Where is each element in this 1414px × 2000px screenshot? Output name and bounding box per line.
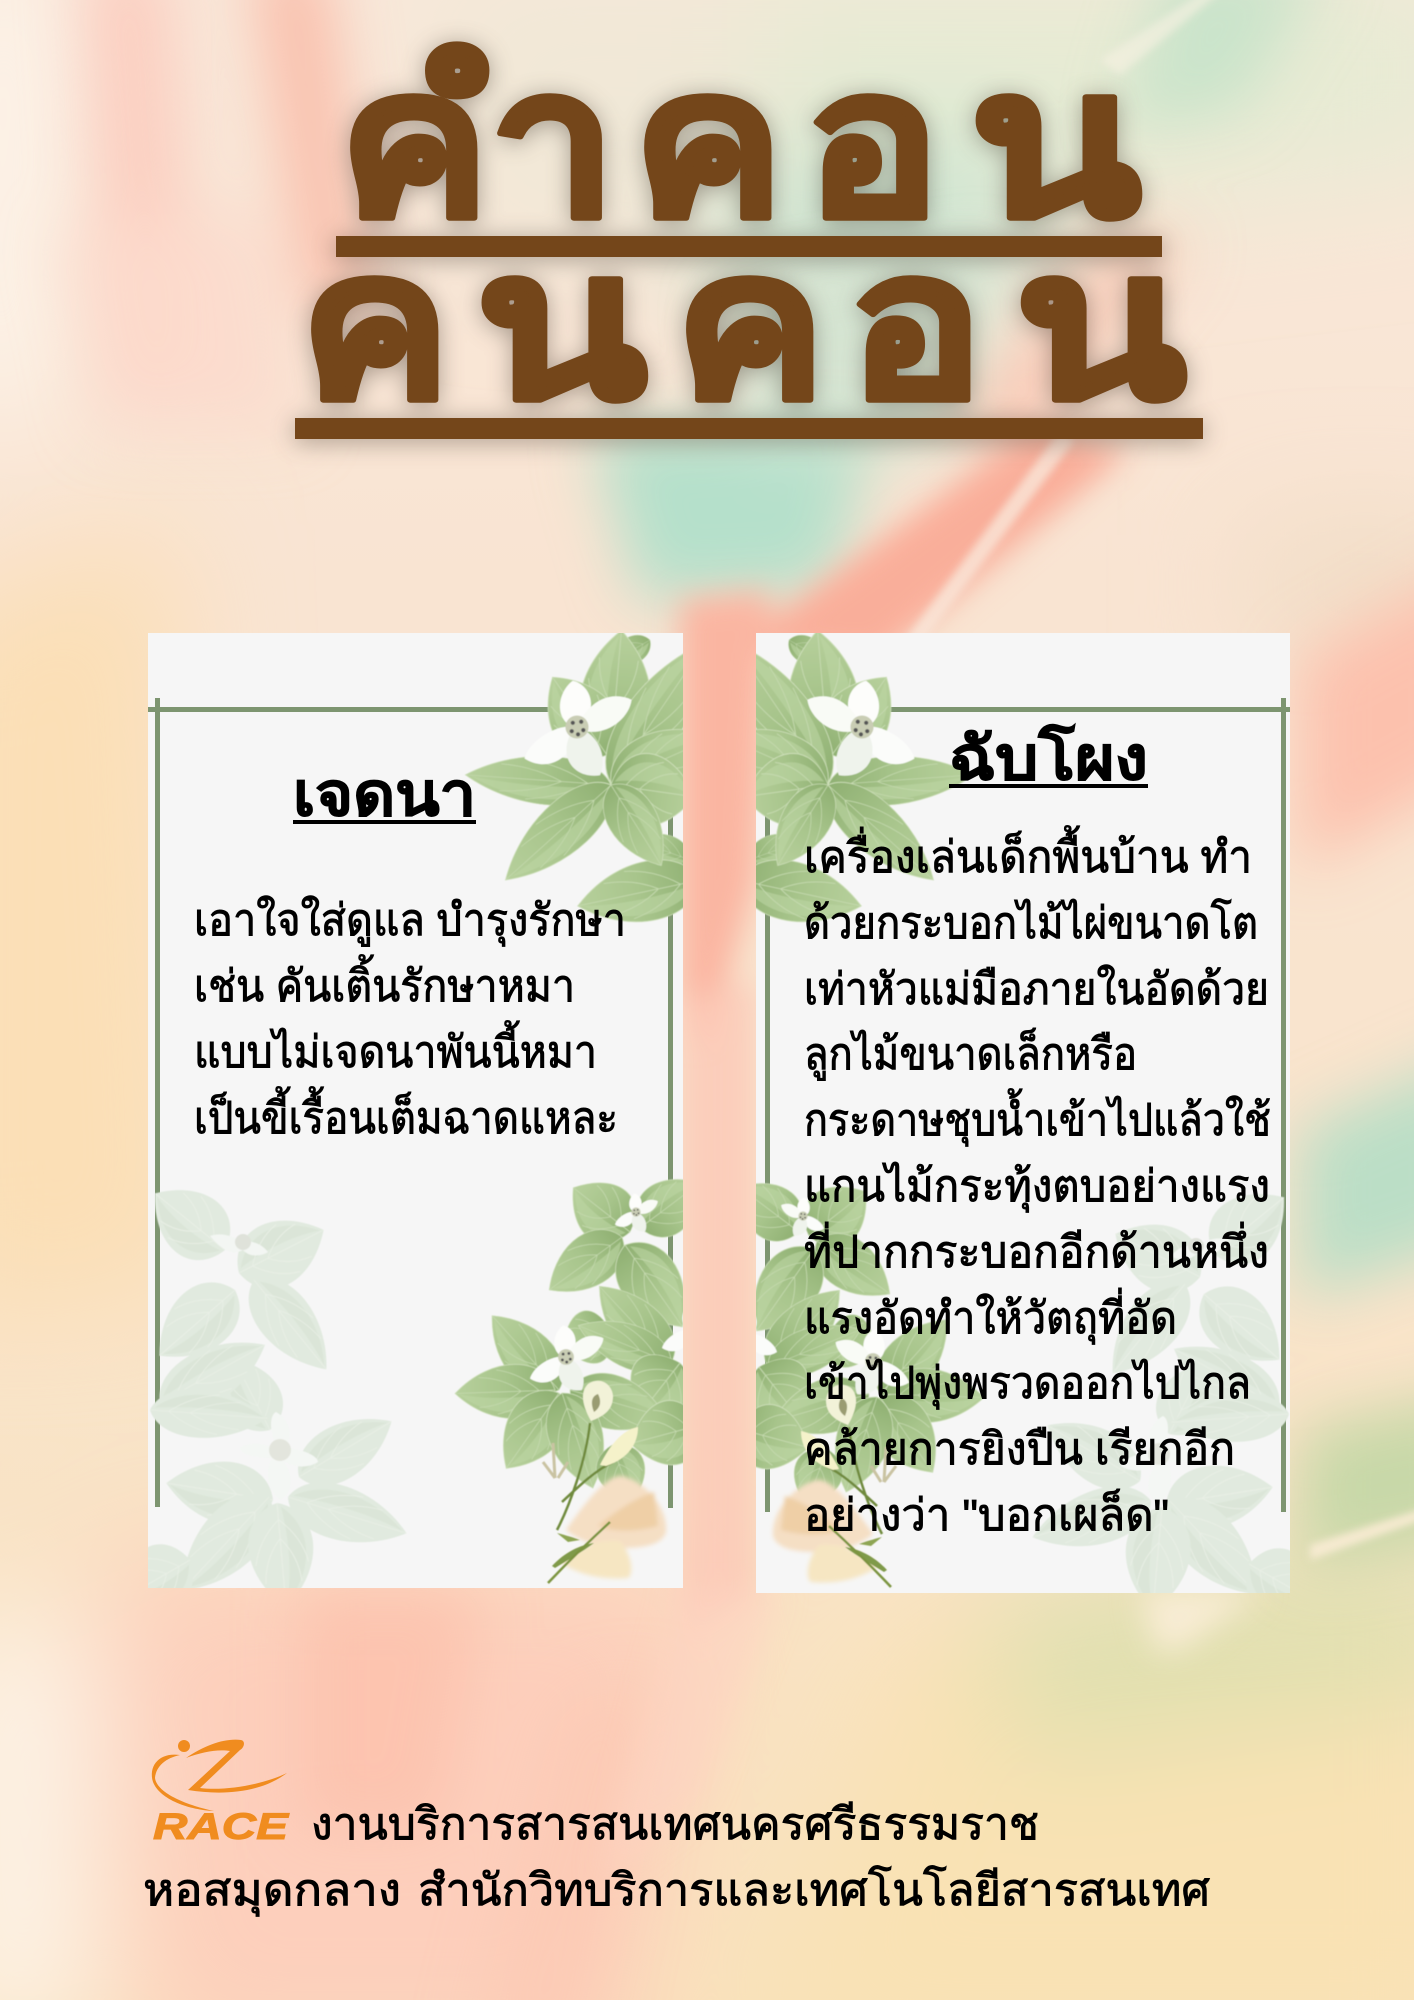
- panel body text: เท่าหัวแม่มือภายในอัดด้วย: [804, 964, 1269, 1014]
- panel body text: ด้วยกระบอกไม้ไผ่ขนาดโต: [804, 898, 1258, 948]
- title line 1: น: [970, 30, 1141, 258]
- footer text line 1: งานบริการสารสนเทศนครศรีธรรมราช: [311, 1800, 1039, 1849]
- panel: เจดนา: [148, 633, 683, 1588]
- pale botanical decoration, lower left: [105, 1168, 414, 1628]
- panel body text: เข้าไปพุ่งพรวดออกไปไกล: [804, 1358, 1251, 1410]
- botanical decoration, lower left: [716, 1165, 985, 1587]
- panel body text: แบบไม่เจดนาพันนี้หมา: [194, 1020, 597, 1077]
- title line 1: อ: [805, 29, 940, 258]
- panel body text: ลูกไม้ขนาดเล็กหรือ: [804, 1028, 1137, 1081]
- footer text line 2: [143, 1865, 1210, 1917]
- icon: RACE logo: RACE: [153, 1806, 290, 1847]
- title: two-line heading with underlines: [284, 29, 1214, 456]
- footer: logo and credits: [143, 1740, 1210, 1917]
- panel: ฉับโผง: [756, 633, 1290, 1593]
- title line 1: คำ: [339, 29, 616, 258]
- botanical decoration, upper right: [464, 625, 731, 935]
- icon: RACE logo: [152, 1740, 290, 1847]
- title line 2: น: [476, 212, 647, 440]
- botanical decoration, upper left: [708, 625, 975, 935]
- pale botanical decoration, lower right: [1025, 1172, 1334, 1632]
- panel body text: อย่างว่า "บอกเผล็ด": [804, 1489, 1169, 1540]
- footer text line 2: หอสมุดกลาง: [143, 1866, 401, 1917]
- panel frame lines: [765, 698, 1290, 1512]
- title line 2: ค: [675, 211, 826, 440]
- title line 2: ค: [300, 211, 451, 440]
- panel heading: เจดนา: [293, 761, 476, 828]
- botanical decoration, lower right: [454, 1161, 723, 1583]
- panel heading: ฉับโผง: [949, 723, 1148, 792]
- title line 2: อ: [848, 211, 983, 440]
- panel body text: แรงอัดทำให้วัตถุที่อัด: [804, 1287, 1177, 1345]
- panel body text: เป็นขี้เรื้อนเต็มฉาดแหละ: [194, 1086, 618, 1143]
- title underline 1: [336, 236, 1162, 257]
- panel body text: [194, 895, 626, 1143]
- panel body text: ที่ปากกระบอกอีกด้านหนึ่ง: [804, 1221, 1269, 1277]
- title underline 2: [295, 418, 1203, 439]
- title line 2: [300, 211, 1186, 440]
- panel body text: คล้ายการยิงปืน เรียกอีก: [804, 1425, 1235, 1474]
- panel body text: เช่น คันเติ้นรักษาหมา: [194, 954, 575, 1011]
- panel frame lines: [148, 698, 673, 1508]
- title line 2: น: [1015, 212, 1186, 440]
- panel body text: เครื่องเล่นเด็กพื้นบ้าน ทำ: [804, 825, 1252, 882]
- title line 1: [339, 29, 1141, 258]
- panel body text: [804, 825, 1271, 1540]
- footer text line 2: สำนักวิทบริการและเทศโนโลยีสารสนเทศ: [418, 1865, 1210, 1915]
- panel body text: เอาใจใส่ดูแล บำรุงรักษา: [194, 895, 626, 947]
- title line 1: ค: [633, 29, 784, 258]
- panel body text: แกนไม้กระทุ้งตบอย่างแรง: [804, 1161, 1270, 1213]
